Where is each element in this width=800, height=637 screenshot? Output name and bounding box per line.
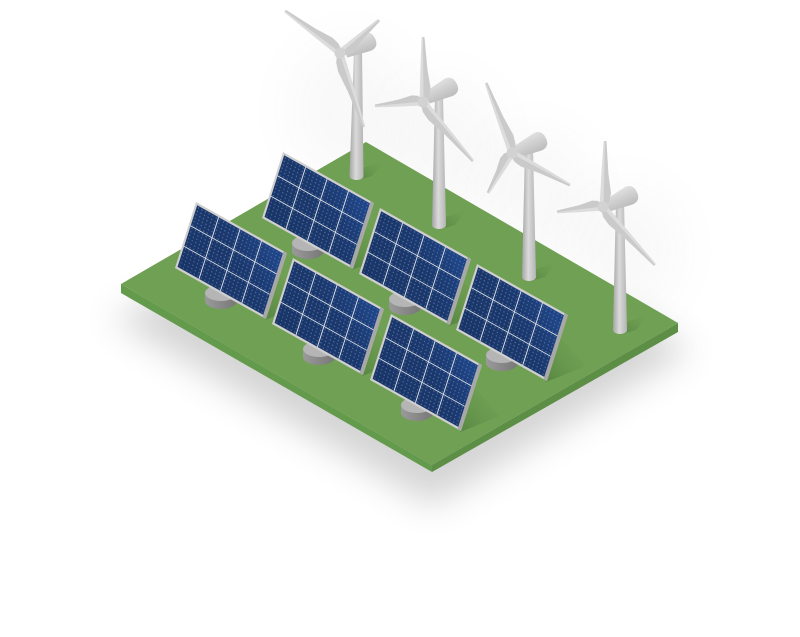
panel ground shadows (265, 225, 586, 432)
tower (432, 96, 446, 229)
solar panel: back row right (456, 264, 568, 381)
hub (598, 202, 608, 212)
solar panel: back row left (262, 152, 374, 269)
faint turbine haze (290, 40, 680, 315)
wind turbine 3 (482, 80, 572, 281)
platform left side (121, 284, 432, 472)
blades (556, 141, 658, 270)
support: front row left (205, 285, 237, 309)
tower ground shadows (358, 160, 649, 334)
nacelle (423, 75, 461, 106)
support: back row middle (389, 291, 421, 315)
tower (522, 148, 536, 281)
platform right side (432, 323, 678, 472)
hub (334, 48, 346, 58)
nacelle (341, 30, 379, 60)
ground shadow (112, 240, 690, 505)
solar panel: front row right (370, 314, 482, 431)
wind turbine 2 (374, 37, 476, 229)
platform (121, 142, 678, 472)
blades (283, 5, 384, 129)
tower (350, 50, 364, 180)
blades (482, 80, 572, 195)
support: back row right (486, 347, 518, 371)
wind turbine 1 (283, 5, 384, 180)
tower (613, 202, 627, 334)
support: front row middle (303, 341, 335, 365)
support: front row right (401, 397, 433, 421)
solar panel: back row middle (359, 208, 471, 325)
hub (506, 148, 518, 158)
platform top (121, 142, 678, 465)
blades (374, 37, 476, 166)
nacelle (512, 129, 550, 160)
support: back row left (292, 235, 324, 259)
wind turbine 4 (556, 141, 658, 334)
nacelle (603, 183, 641, 214)
panel supports (205, 235, 518, 421)
solar panel: front row middle (272, 258, 384, 375)
solar panel: front row left (175, 202, 287, 319)
hub (418, 96, 428, 108)
